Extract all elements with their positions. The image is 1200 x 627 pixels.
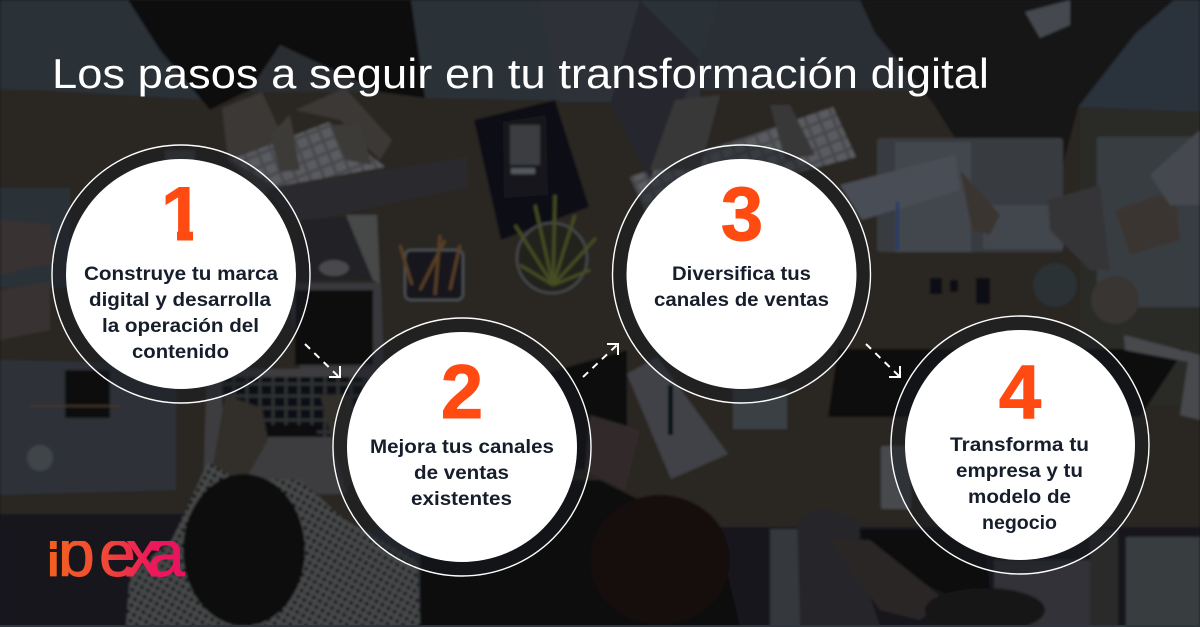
step 3 number: 3 (721, 172, 763, 257)
step 2 ring (333, 318, 591, 576)
left papers (0, 360, 176, 495)
step 3 text: Diversifica tus (672, 264, 811, 285)
logo: ibexa: b (58, 516, 95, 590)
step 2 text: de ventas (414, 463, 509, 484)
step 1 disc (66, 159, 296, 389)
step 1 text: la operación del (102, 316, 259, 337)
step 4 ring (891, 316, 1149, 574)
table left details (0, 188, 70, 288)
step 2 number: 2 (441, 350, 483, 435)
step 4 text: modelo de (968, 487, 1071, 508)
step 1 ring (52, 145, 310, 403)
floor and bottom people (0, 514, 210, 627)
logo: ibexa: a (148, 516, 185, 590)
laptop 1 (288, 283, 384, 370)
step 1 text: contenido (132, 342, 229, 363)
step 2 disc (347, 332, 577, 562)
plant (517, 223, 587, 293)
step 4 (891, 316, 1149, 574)
pencil cup (405, 250, 463, 300)
step 4 text: negocio (982, 513, 1057, 534)
step 3 (612, 145, 870, 403)
step 2 (333, 318, 591, 576)
step 2 text: existentes (411, 489, 512, 510)
title: Los pasos a seguir en tu transformación digital (52, 50, 989, 97)
step 2 text: Mejora tus canales (370, 437, 554, 458)
binder (877, 138, 1063, 252)
step 3 text (654, 264, 829, 311)
step 4 disc (905, 330, 1135, 560)
step 3 disc (626, 159, 856, 389)
logo: ibexa: i (46, 516, 61, 590)
step 3 ring (612, 145, 870, 403)
keyboard top mid (630, 107, 856, 213)
step 3 text: canales de ventas (654, 290, 829, 311)
step 4 text: Transforma tu (950, 435, 1089, 456)
calculator notebook (474, 100, 589, 240)
logo: ibexa: e (99, 516, 136, 590)
right papers and hand (1097, 137, 1200, 307)
step 1 (52, 145, 310, 403)
step 1 text (84, 264, 278, 363)
arrow: step 3 to step 4 (866, 344, 900, 377)
bottom edge strip (0, 625, 1200, 627)
logo: ibexa: x (126, 516, 159, 590)
step 1 number base mask (150, 228, 212, 244)
step 4 text: empresa y tu (956, 461, 1083, 482)
bottom right devices (828, 349, 1185, 417)
arrow: step 1 to step 2 (305, 344, 340, 377)
step 1 number: 1 (161, 172, 203, 257)
logo: ibexa (50, 541, 186, 577)
step 4 number: 4 (999, 350, 1041, 435)
step 1 text: digital y desarrolla (89, 290, 271, 311)
step 2 text (370, 437, 554, 510)
step 1 text: Construye tu marca (84, 264, 278, 285)
arrow: step 2 to step 3 (583, 344, 618, 377)
step 4 text (950, 435, 1089, 534)
